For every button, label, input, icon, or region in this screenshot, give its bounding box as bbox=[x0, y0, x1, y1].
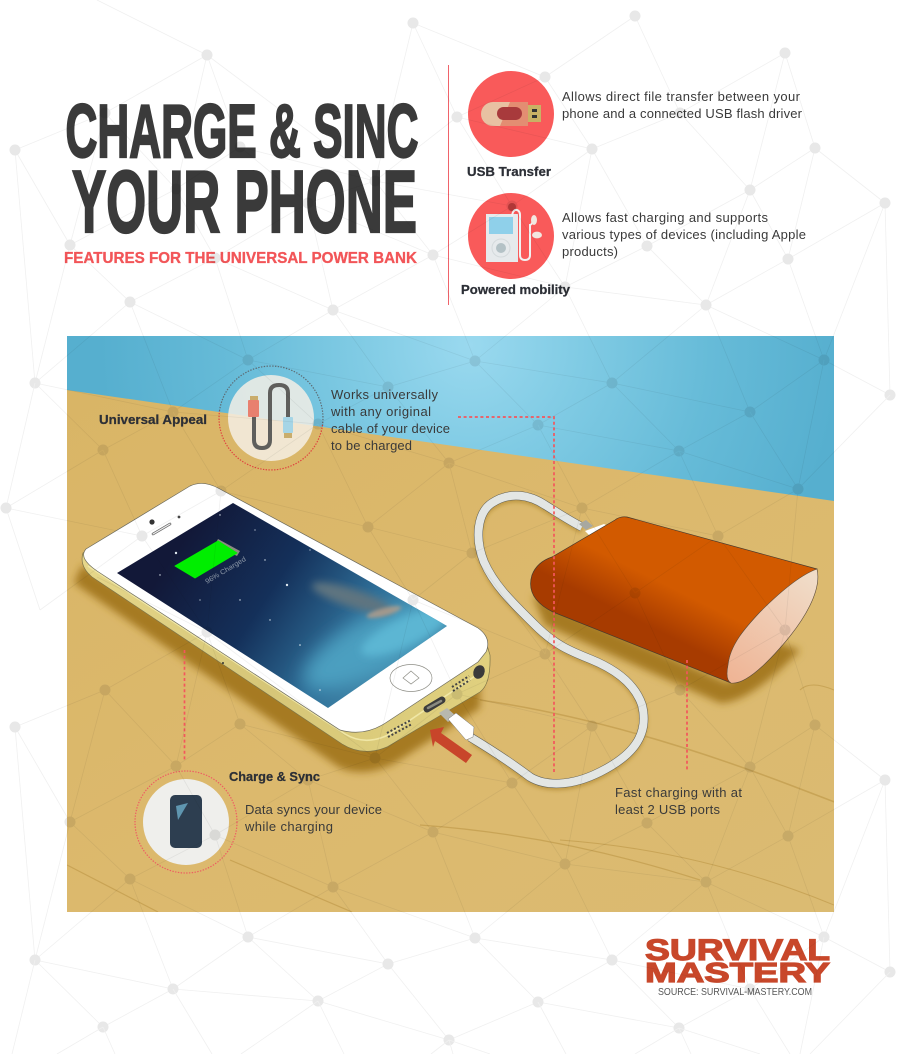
icon: music player bbox=[468, 193, 554, 279]
description: cable of your device bbox=[331, 421, 450, 436]
description bbox=[244, 802, 382, 834]
subtitle: FEATURES FOR THE UNIVERSAL POWER BANK bbox=[64, 250, 417, 267]
leader line bbox=[184, 650, 186, 762]
feature: USB Transfer bbox=[467, 71, 803, 179]
callout: Charge & Sync bbox=[135, 650, 382, 873]
logo: Survival Mastery: SOURCE: SURVIVAL-MASTERY.COM bbox=[658, 986, 812, 998]
description: to be charged bbox=[331, 438, 412, 453]
title bbox=[66, 89, 418, 251]
description: phone and a connected USB flash driver bbox=[562, 106, 803, 121]
arrow bbox=[430, 727, 472, 763]
shadow of cable bbox=[473, 499, 644, 787]
home button bbox=[390, 664, 432, 692]
description: Allows fast charging and supports bbox=[562, 210, 768, 225]
battery label: 96% Charged bbox=[204, 556, 248, 586]
phone front bbox=[84, 483, 488, 732]
description bbox=[562, 89, 803, 121]
earpiece and camera bbox=[149, 516, 180, 534]
lightning connector bbox=[439, 708, 474, 740]
sky background bbox=[67, 336, 834, 506]
logo: Survival Mastery: SURVIVAL bbox=[645, 934, 830, 967]
description bbox=[562, 210, 806, 259]
icon: charging cable bbox=[219, 366, 323, 470]
charging cable bbox=[470, 496, 644, 784]
description: while charging bbox=[244, 819, 333, 834]
heading: Universal Appeal bbox=[99, 412, 207, 427]
divider bbox=[448, 65, 449, 305]
phone body bbox=[82, 490, 490, 751]
power bank end cap bbox=[727, 569, 818, 683]
power bank body bbox=[531, 517, 817, 683]
leader line bbox=[686, 660, 688, 772]
leader line: universal appeal bbox=[458, 417, 554, 772]
screen bbox=[117, 503, 459, 708]
logo: Survival Mastery bbox=[645, 934, 830, 998]
description: Data syncs your device bbox=[245, 802, 382, 817]
title: CHARGE & SINC bbox=[66, 89, 418, 173]
shadow under power bank bbox=[532, 595, 800, 703]
description: with any original bbox=[330, 404, 431, 419]
panel: desk scene bbox=[67, 336, 888, 912]
sand surface bbox=[67, 390, 834, 912]
icon: USB flash drive bbox=[468, 71, 554, 157]
shadow under phone bbox=[74, 565, 480, 772]
description: Fast charging with at bbox=[615, 785, 742, 800]
smartphone bbox=[82, 483, 490, 751]
title: YOUR PHONE bbox=[72, 152, 417, 251]
callout: Universal Appeal bbox=[99, 366, 450, 470]
label: USB Transfer bbox=[467, 164, 551, 179]
icon: phone bbox=[135, 771, 237, 873]
feature: Powered mobility bbox=[461, 193, 806, 297]
description: Works universally bbox=[331, 387, 438, 402]
description: Allows direct file transfer between your bbox=[562, 89, 801, 104]
battery indicator bbox=[175, 539, 240, 578]
heading: Charge & Sync bbox=[229, 769, 320, 784]
logo: Survival Mastery: MASTERY bbox=[645, 957, 830, 988]
description: least 2 USB ports bbox=[615, 802, 720, 817]
description bbox=[615, 785, 742, 817]
description: products) bbox=[562, 244, 618, 259]
power bank bbox=[531, 517, 818, 683]
label: Powered mobility bbox=[461, 282, 571, 297]
callout: Fast charging bbox=[615, 660, 742, 817]
charging port bbox=[427, 700, 442, 709]
description bbox=[330, 387, 450, 453]
description: various types of devices (including Apple bbox=[562, 227, 806, 242]
usb connector bbox=[579, 520, 612, 538]
speakers and jack bbox=[222, 662, 487, 737]
